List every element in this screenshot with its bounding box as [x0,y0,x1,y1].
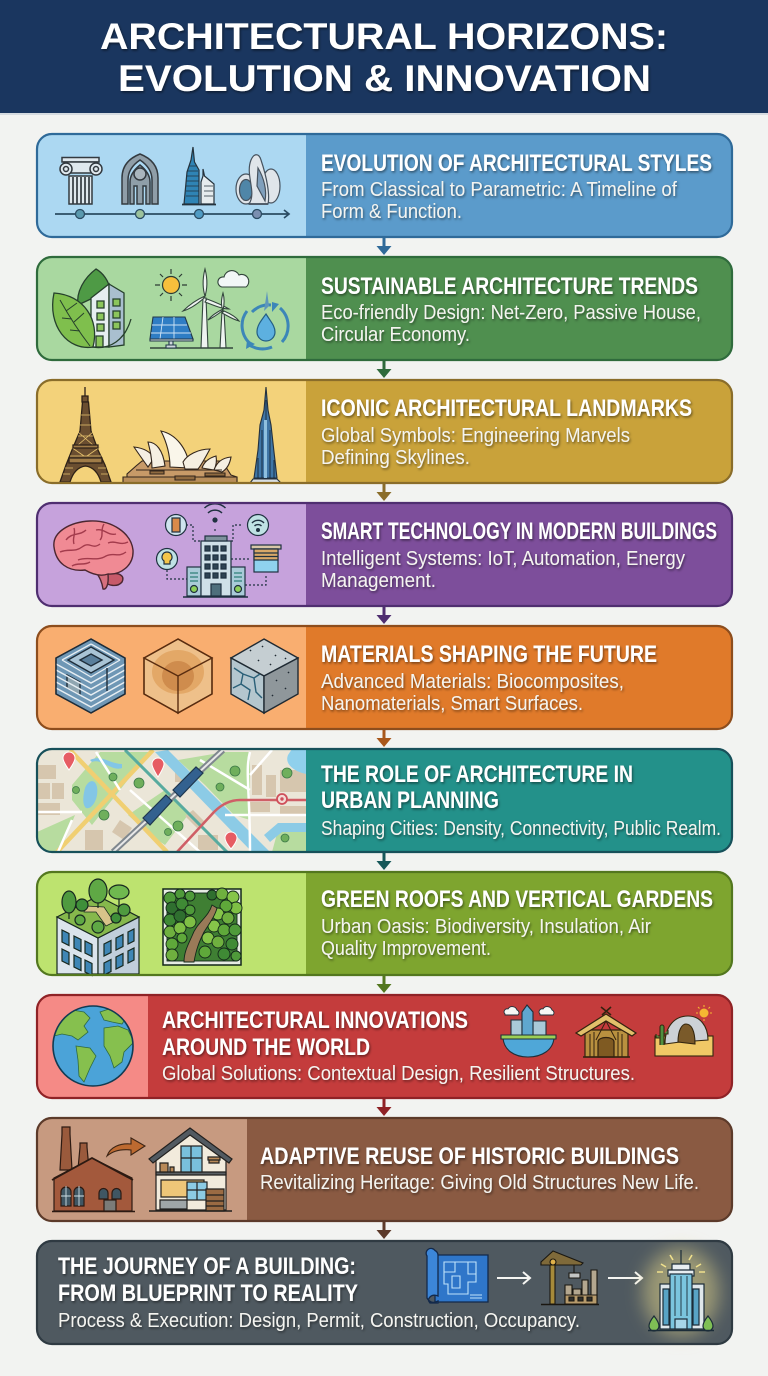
icon: burj khalifa [250,387,281,483]
icon: water cycle [242,291,288,349]
panel 10 text: FROM BLUEPRINT TO REALITY [58,1280,358,1307]
panel 7 text: Quality Improvement. [321,938,491,960]
icon: skyscraper [182,147,216,204]
icon: eiffel tower [60,387,111,482]
title: EVOLUTION & INNOVATION [118,58,651,99]
panel 3: iconic architectural landmarks [37,380,732,483]
panel 3 text: Defining Skylines. [321,447,470,469]
panel 5 text [321,641,657,715]
map illustration [37,749,306,852]
panel 2 text: Eco-friendly Design: Net-Zero, Passive House, [321,302,701,324]
icon: transformation arrow [107,1138,145,1156]
panel 1 text: Form & Function. [321,201,462,223]
icon: smart building network [156,504,281,597]
panel 6 text: Shaping Cities: Density, Connectivity, Public Realm. [321,818,721,840]
icon: construction crane [541,1251,599,1304]
icon: leaf and green building [53,269,131,348]
panel 9 text: Revitalizing Heritage: Giving Old Structures New Life. [260,1172,699,1194]
panel 2 text [321,273,701,346]
panel 8 text [162,1007,635,1085]
panel 2 text: Circular Economy. [321,324,470,346]
icon: sun [155,269,187,301]
panel 3 text [321,395,692,469]
panel 3 text: ICONIC ARCHITECTURAL LANDMARKS [321,395,692,422]
icon: blueprint [426,1248,488,1303]
panel 4 text: Intelligent Systems: IoT, Automation, Energy [321,548,685,570]
panel 7 text [321,886,713,960]
panel 7 text: Urban Oasis: Biodiversity, Insulation, Air [321,916,651,938]
icon: old factory [52,1127,135,1212]
panel 5: materials shaping the future [37,626,732,729]
panel 4 text [321,518,717,592]
icon: parametric building [236,155,280,204]
title: ARCHITECTURAL HORIZONS: [100,16,668,57]
panel 5 text: MATERIALS SHAPING THE FUTURE [321,641,657,668]
icon: wind turbines [150,269,239,348]
icon: classical column [60,158,102,204]
icon: 3D printed cube [56,639,125,713]
icon: trains [143,767,203,825]
panel 1 text [321,150,712,223]
icon: finished tower [643,1248,719,1336]
icon: converted house [149,1128,232,1211]
timeline [55,210,289,218]
panel 4 text: Management. [321,570,436,592]
icon: bamboo hut [576,1007,636,1057]
panel 6 text: URBAN PLANNING [321,787,499,814]
icon: solar panel [150,317,193,348]
icon: floating island city [501,1005,556,1057]
panel 4: smart technology in modern buildings [37,503,732,606]
icon: green roof building [57,879,139,976]
panel 9 text: ADAPTIVE REUSE OF HISTORIC BUILDINGS [260,1143,679,1170]
icon: concrete cube [231,639,298,713]
header banner [0,0,768,115]
panel 10 text [58,1253,580,1332]
panel 10 text: THE JOURNEY OF A BUILDING: [58,1253,356,1280]
arrow [497,1272,530,1284]
panel 2: sustainable architecture trends [37,257,732,360]
panel 3 text: Global Symbols: Engineering Marvels [321,425,630,447]
panel 8 text: ARCHITECTURAL INNOVATIONS [162,1007,468,1034]
icon: desert dome [655,1005,713,1056]
arrow [608,1272,642,1284]
panel 10 text: Process & Execution: Design, Permit, Construction, Occupancy. [58,1310,580,1332]
icon: vertical garden [163,888,242,965]
icon: wood cube [144,639,212,713]
panel 8 text: AROUND THE WORLD [162,1034,370,1061]
trees [72,766,292,842]
icon: globe [53,1006,134,1086]
icon: map pins [63,752,237,849]
panel 6 text: THE ROLE OF ARCHITECTURE IN [321,761,633,788]
icon: sydney opera house [123,431,237,483]
icon: gothic arch [122,154,158,204]
icon: cloud [218,271,249,287]
connector arrows between panels [376,238,392,1239]
panel 6: the role of architecture in urban planning [37,749,732,852]
panel 8 text: Global Solutions: Contextual Design, Resilient Structures. [162,1063,635,1085]
panel 9: adaptive reuse of historic buildings [37,1118,732,1221]
panel 7: green roofs and vertical gardens [37,872,732,976]
title [100,16,668,99]
panel 10: the journey of a building [37,1241,732,1344]
panel 5 text: Advanced Materials: Biocomposites, [321,671,624,693]
icon: brain [54,521,133,589]
panel 8: architectural innovations around the world [37,995,732,1098]
panel 5 text: Nanomaterials, Smart Surfaces. [321,693,583,715]
panel 1: evolution of architectural styles [37,134,732,237]
panel 9 text [260,1143,699,1194]
panel 6 text [321,761,721,840]
panel 1 text: From Classical to Parametric: A Timeline of [321,179,677,201]
